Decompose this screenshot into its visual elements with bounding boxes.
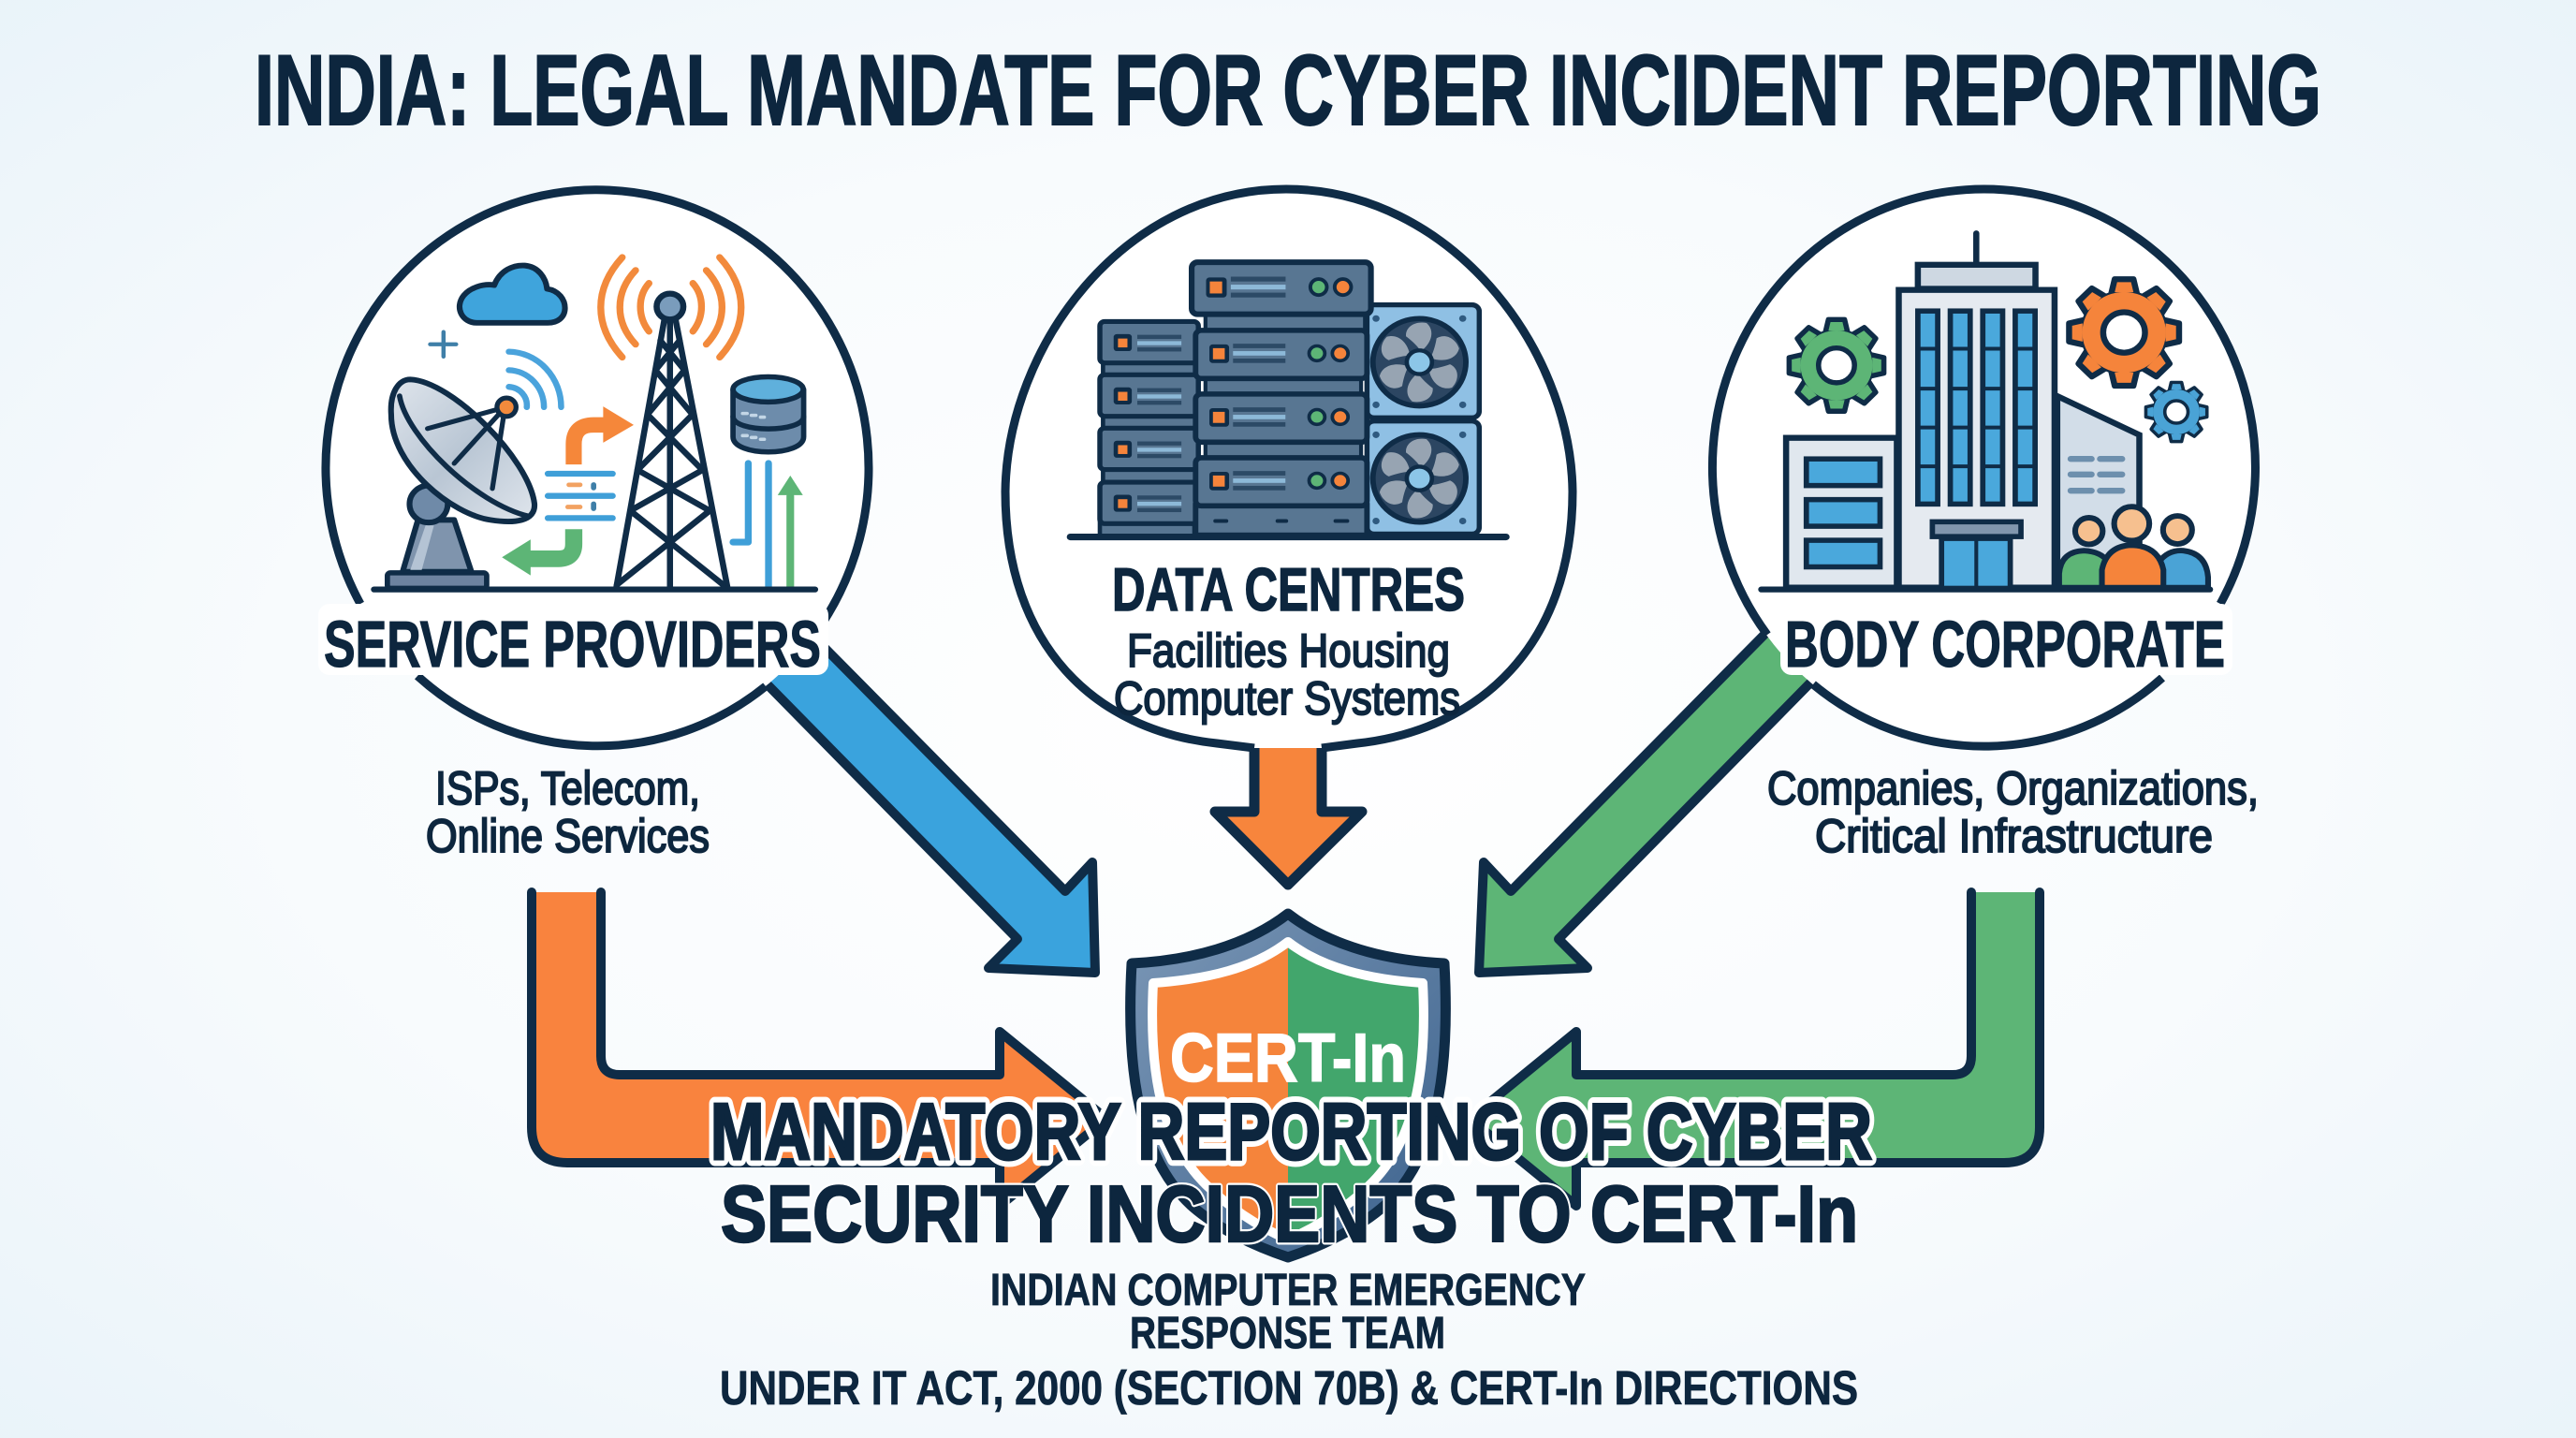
icon: blue gear <box>2145 382 2207 442</box>
text: legal basis: UNDER IT ACT, 2000 (SECTION 70B) & CERT-In DIRECTIONS <box>720 1361 1858 1415</box>
text: body corporate description: Critical Infrastructure <box>1815 810 2213 862</box>
icon: satellite dish <box>388 379 534 588</box>
panel: data centres <box>1005 189 1573 748</box>
text: agency name: INDIAN COMPUTER EMERGENCY <box>990 1266 1586 1315</box>
panel: service providers <box>318 190 869 746</box>
heading: mandatory reporting: MANDATORY REPORTING OF CYBER <box>710 1088 1872 1177</box>
arrow: green diagonal from body corporate <box>1479 571 1883 973</box>
text: data centres description <box>1114 624 1460 725</box>
arrow: orange from data centres <box>1215 740 1362 885</box>
arrow: blue diagonal from service providers <box>693 571 1095 973</box>
heading: mandatory reporting: MANDATORY REPORTING OF CYBER <box>710 1088 1872 1177</box>
icon: office buildings, gears and people <box>1762 233 2210 590</box>
text: data centres description: Computer Systems <box>1114 672 1460 725</box>
icon: signal tower <box>617 294 727 586</box>
icon: orange flow arrow <box>574 406 634 464</box>
heading: mandatory reporting: SECURITY INCIDENTS TO CERT-In <box>721 1170 1858 1259</box>
arrow: green elbow from body corporate <box>1470 892 2040 1206</box>
icon: server racks and fans <box>1070 262 1506 537</box>
icon: telecom scene <box>374 257 815 590</box>
icon: database <box>733 377 804 452</box>
icon: cloud <box>460 266 565 323</box>
label: CERT-In: CERT-In <box>1170 1020 1406 1096</box>
panel: body corporate <box>1712 189 2255 746</box>
text: service providers description: ISPs, Telecom, <box>435 762 700 814</box>
icon: central server stack <box>1192 262 1371 536</box>
text: body corporate description: Companies, Organizations, <box>1767 762 2259 814</box>
icon: green flow arrow <box>502 529 574 576</box>
icon: cooling fans <box>1367 305 1479 534</box>
icon: left server stack <box>1100 321 1198 537</box>
text: agency name <box>990 1266 1586 1358</box>
heading: data centres: DATA CENTRES <box>1112 555 1465 624</box>
text: data centres description: Facilities Housing <box>1127 624 1450 677</box>
icon: CERT-In shield <box>1131 914 1445 1257</box>
icon: people <box>2059 506 2208 588</box>
icon: green gear <box>1789 319 1884 411</box>
text: service providers description <box>426 762 710 862</box>
arrow: orange elbow from service providers <box>532 892 1106 1206</box>
icon: buildings <box>1786 233 2140 588</box>
icon: orange gear <box>2069 279 2179 386</box>
text: body corporate description <box>1767 762 2259 862</box>
text: service providers description: Online Services <box>426 810 710 862</box>
heading: mandatory reporting: SECURITY INCIDENTS TO CERT-In <box>721 1170 1858 1259</box>
heading: body corporate: BODY CORPORATE <box>1785 608 2225 681</box>
heading: mandatory reporting <box>710 1088 1872 1259</box>
heading: service providers: SERVICE PROVIDERS <box>324 608 821 681</box>
text: agency name: RESPONSE TEAM <box>1130 1309 1445 1358</box>
